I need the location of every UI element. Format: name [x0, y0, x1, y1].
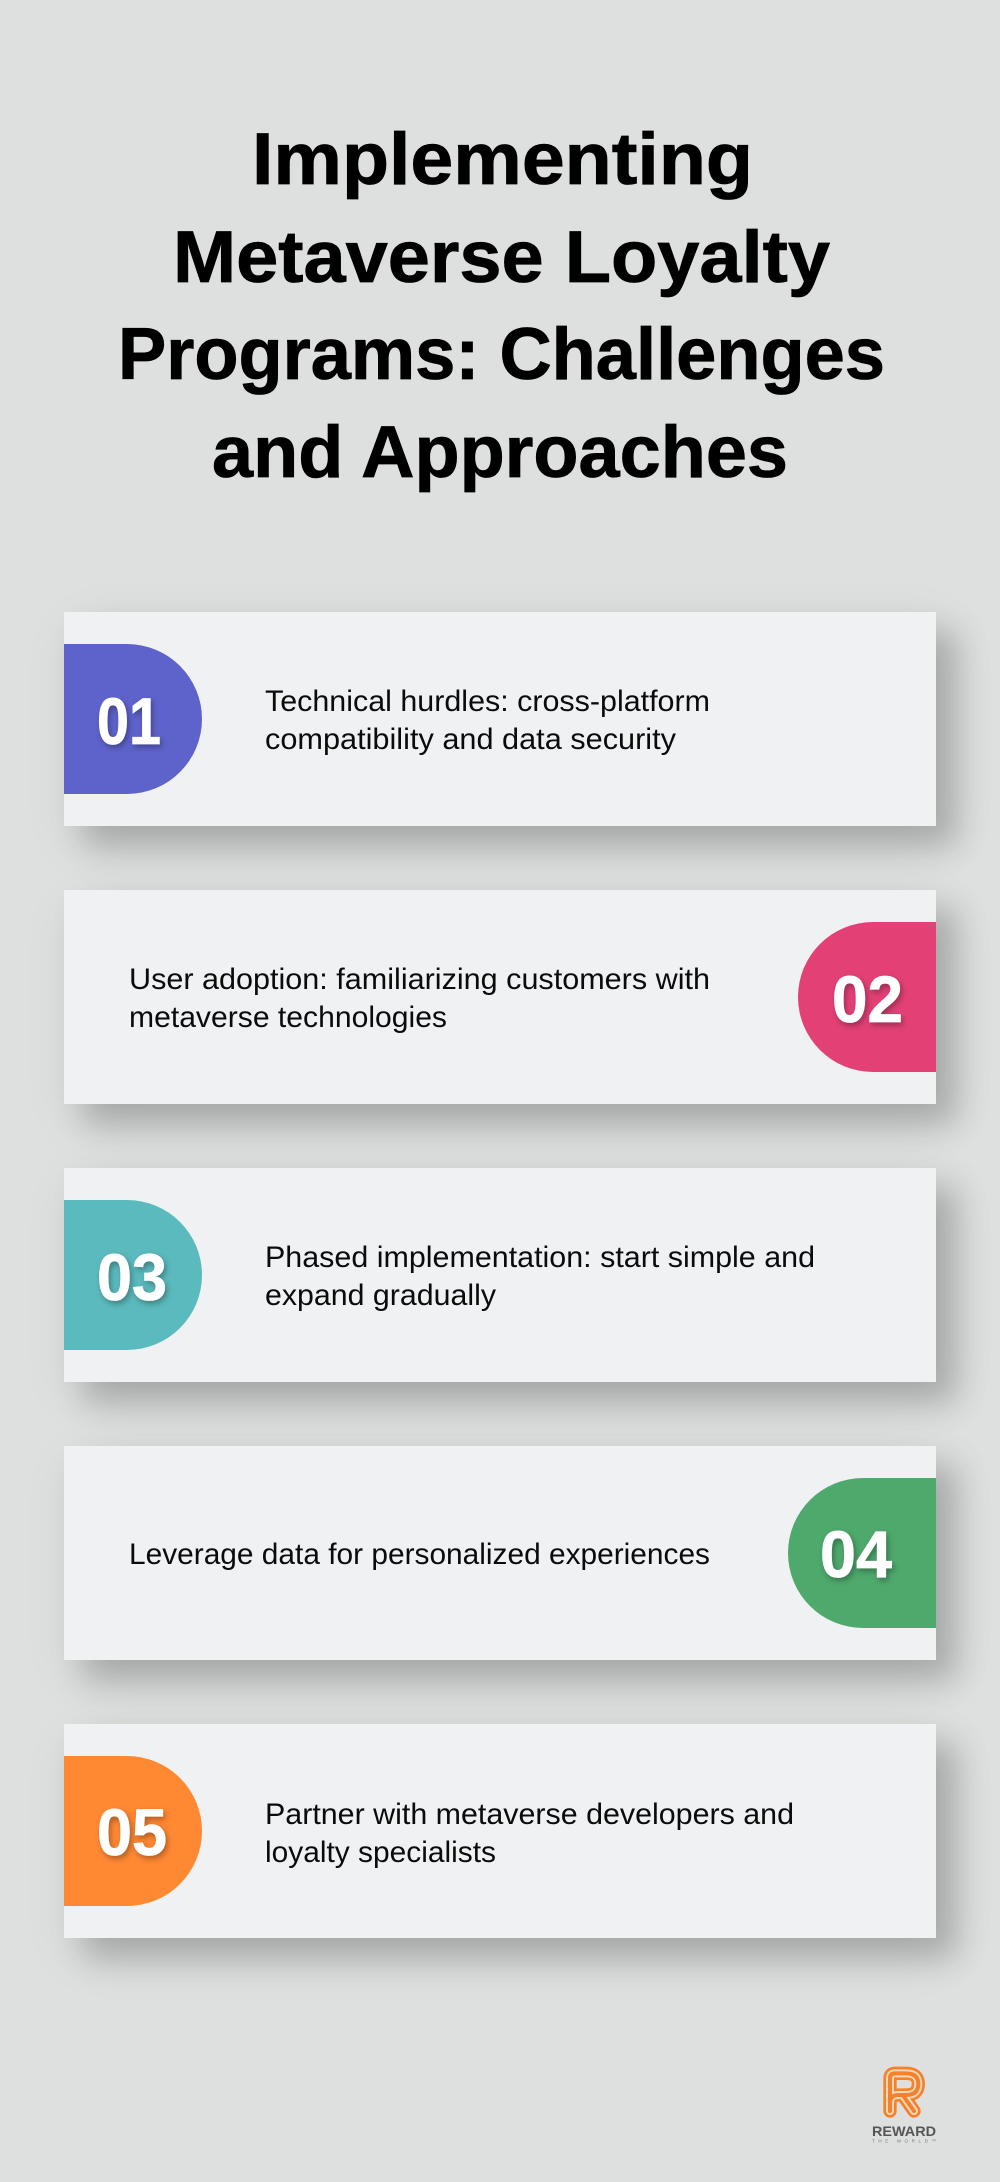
step 02 text and number: User adoption: familiarizing customers with: [129, 963, 710, 996]
step 04 text and number: [129, 1517, 896, 1591]
panel: step 01: [64, 612, 936, 826]
step 05 text and number: Partner with metaverse developers and: [265, 1798, 794, 1831]
title: Implementing: [252, 119, 753, 200]
panel: step 04: [64, 1446, 936, 1660]
step 02 text and number: [129, 962, 906, 1036]
step 05 text and number: 05: [97, 1795, 167, 1869]
panel: step 05: [64, 1724, 936, 1938]
step 05 text and number: loyalty specialists: [265, 1836, 496, 1869]
step 03 text and number: [97, 1240, 815, 1314]
step 01 text and number: compatibility and data security: [265, 723, 676, 756]
step 05 text and number: [97, 1795, 794, 1869]
badge: 01: [64, 644, 202, 794]
logo tagline: THE WORLD™: [872, 2138, 936, 2144]
step 03 text and number: expand gradually: [265, 1279, 496, 1312]
step 01 text and number: 01: [97, 684, 161, 758]
title: [118, 119, 885, 493]
badge: 04: [788, 1478, 936, 1628]
panel: step 03: [64, 1168, 936, 1382]
title: Programs: Challenges: [118, 314, 885, 395]
panel: step 02: [64, 890, 936, 1104]
step 02 text and number: 02: [832, 962, 903, 1036]
title: Metaverse Loyalty: [173, 217, 830, 298]
step 02 text and number: metaverse technologies: [129, 1001, 447, 1034]
step 03 text and number: Phased implementation: start simple and: [265, 1241, 815, 1274]
step 04 text and number: Leverage data for personalized experiences: [129, 1538, 710, 1571]
step 01 text and number: [97, 684, 710, 758]
badge: 03: [64, 1200, 202, 1350]
badge: 05: [64, 1756, 202, 1906]
badge: 02: [798, 922, 936, 1072]
step 01 text and number: Technical hurdles: cross-platform: [265, 685, 710, 718]
step 03 text and number: 03: [97, 1240, 167, 1314]
icon: R mark: [890, 2073, 918, 2111]
title: and Approaches: [212, 412, 788, 493]
step 04 text and number: 04: [820, 1517, 892, 1591]
logo wordmark: REWARD: [872, 2123, 936, 2139]
